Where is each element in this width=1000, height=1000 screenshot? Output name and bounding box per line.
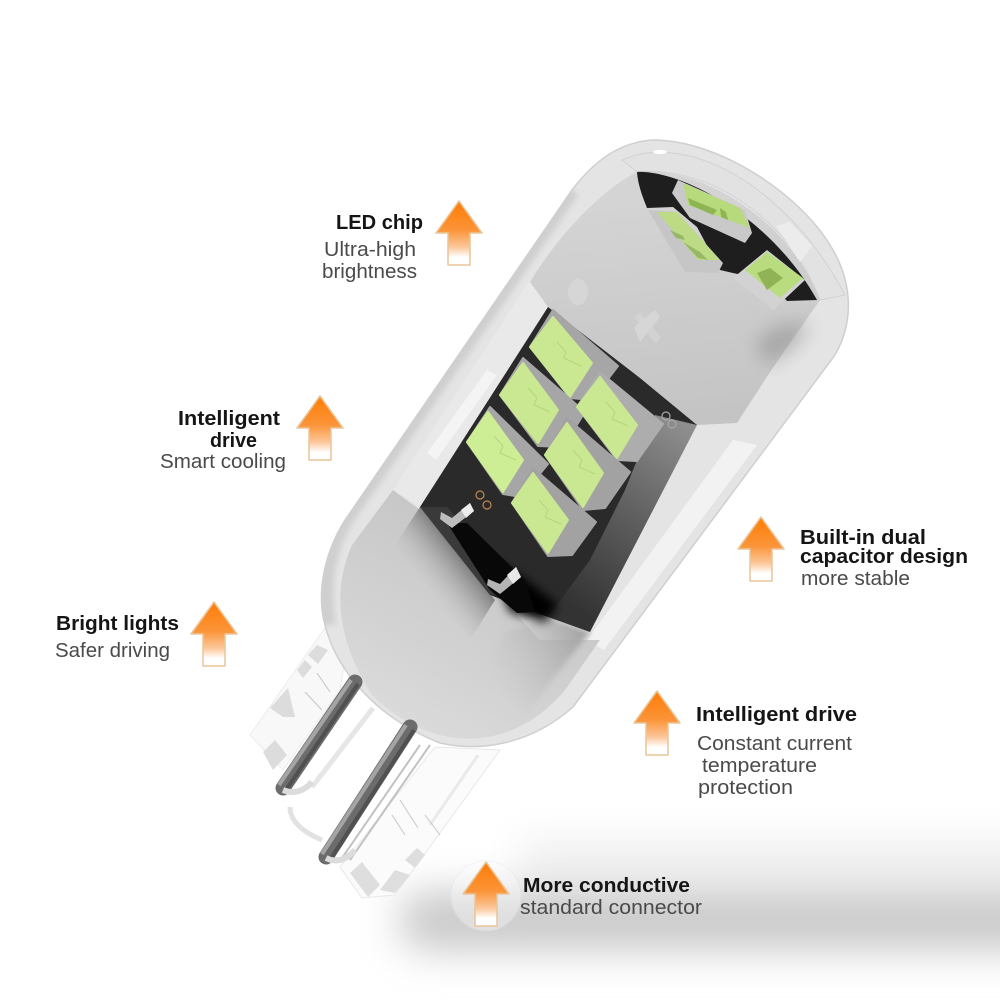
- capacitor with metal clips: [420, 503, 558, 622]
- plus marker and round marker: [568, 279, 661, 343]
- left tab: [250, 628, 345, 770]
- top LED chip right: [733, 250, 805, 310]
- callout text: [55, 613, 179, 662]
- arrow: [634, 691, 680, 755]
- callout text: LED chip: [336, 212, 423, 234]
- upper core: [530, 171, 820, 425]
- callout text: brightness: [322, 261, 417, 283]
- right bright strip: [587, 440, 757, 650]
- callout text: Safer driving: [55, 640, 170, 662]
- callout: Bright lights: [55, 602, 237, 666]
- led F: [512, 468, 596, 556]
- callout text: drive: [210, 430, 257, 452]
- callout: Intelligent drive, cooling: [160, 396, 343, 473]
- callout text: protection: [698, 777, 793, 799]
- bulb shell: [322, 140, 848, 747]
- callout text: more stable: [801, 568, 910, 590]
- top LED chip back: [672, 180, 752, 243]
- right tab: [340, 747, 500, 898]
- led A: [530, 310, 618, 400]
- neck rails: [312, 708, 373, 787]
- callout: Built-in dual capacitor: [738, 517, 968, 590]
- lower internal patches: [395, 507, 590, 716]
- callout text: [520, 875, 702, 919]
- glass cap: [622, 152, 845, 300]
- callout text: capacitor design: [800, 546, 968, 568]
- clip ring: [290, 807, 322, 840]
- callout text: [696, 704, 857, 799]
- top clip: [440, 503, 474, 528]
- callout text: standard connector: [520, 897, 702, 919]
- callout text: Ultra-high: [324, 239, 416, 261]
- callout text: Constant current: [697, 733, 852, 755]
- callout text: Intelligent drive: [696, 704, 857, 726]
- led E: [545, 418, 630, 510]
- dark chamber behind top LEDs: [637, 172, 817, 301]
- lighter board band: [548, 415, 697, 632]
- arrow: [738, 517, 784, 581]
- callout text: More conductive: [523, 875, 690, 897]
- soft shadow under chamber: [755, 323, 810, 365]
- ground shadow: [400, 840, 1000, 950]
- led B: [500, 358, 585, 447]
- capacitor body: [447, 523, 535, 613]
- circuit board: [420, 307, 697, 632]
- connector base: clear plastic: [250, 628, 500, 898]
- capacitor shadow: [490, 560, 558, 622]
- callout text: Smart cooling: [160, 451, 286, 473]
- arrow: [297, 396, 343, 460]
- callout text: Bright lights: [56, 613, 179, 635]
- metal pin right: [322, 725, 414, 860]
- callout text: [160, 408, 286, 473]
- copper pads: [476, 491, 491, 509]
- callout: Intelligent drive, constant current: [634, 691, 857, 799]
- callout: More conductive: [451, 861, 702, 931]
- callout text: [322, 212, 423, 283]
- top LED chip left: [648, 210, 723, 273]
- callout text: Intelligent: [178, 408, 280, 430]
- arrow: [463, 862, 509, 926]
- bottom clip: [487, 567, 521, 594]
- left edge tint: [325, 190, 572, 625]
- callout text: temperature: [702, 755, 817, 777]
- led C: [467, 407, 548, 497]
- metal pin left: [279, 680, 358, 792]
- arrow: [191, 602, 237, 666]
- glow disc: [451, 861, 521, 931]
- LED grid: [467, 310, 663, 556]
- led D: [577, 372, 663, 461]
- capacitor facet: [420, 507, 522, 595]
- callout: LED chip: [322, 201, 482, 283]
- callout text: [800, 527, 968, 590]
- left bright strip: [393, 280, 548, 507]
- lower dome: [340, 490, 600, 739]
- callout text: Built-in dual: [800, 527, 926, 549]
- arrow: [436, 201, 482, 265]
